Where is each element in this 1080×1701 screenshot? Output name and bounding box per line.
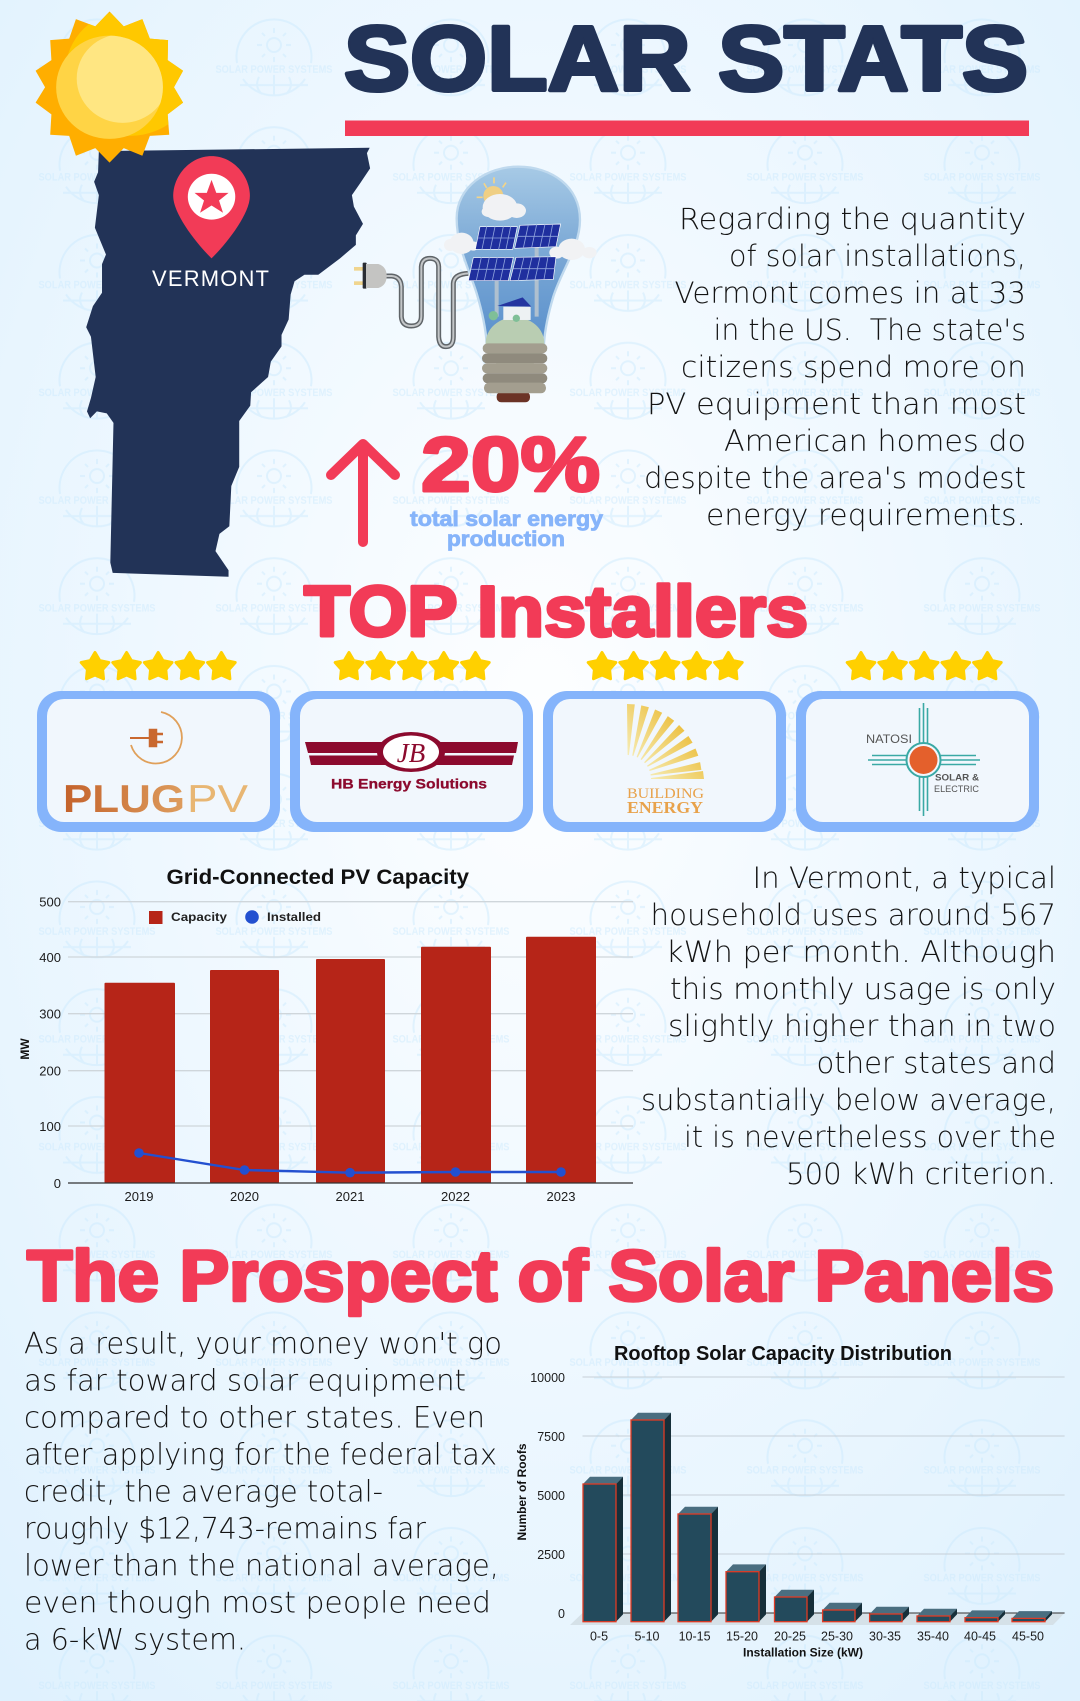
stat: 20%: 20% <box>421 422 600 508</box>
x axis labels: 20-25 <box>774 1630 806 1644</box>
y axis labels: 2500 <box>537 1548 565 1562</box>
text block: intro: in the US. The state's <box>714 313 1026 347</box>
text block: prospect: after applying for the federal tax <box>24 1438 497 1472</box>
stat caption <box>410 508 603 551</box>
text block: household usage <box>641 861 1056 1191</box>
title underline bar <box>345 120 1029 136</box>
text block: intro: Vermont comes in at 33 <box>674 276 1026 310</box>
bars: capacity <box>104 937 596 1183</box>
y axis title: MW <box>18 1038 32 1060</box>
x axis labels <box>590 1630 1044 1644</box>
heading: the prospect of solar panels: The Prospect of Solar Panels <box>27 1238 1054 1316</box>
text block: intro: energy requirements. <box>706 498 1026 532</box>
card: HB Energy Solutions <box>290 691 533 832</box>
text block: prospect: a 6-kW system. <box>24 1623 246 1657</box>
text block: intro: PV equipment than most <box>647 387 1026 421</box>
x axis labels: 10-15 <box>679 1630 711 1644</box>
x axis labels: 2020 <box>230 1189 259 1204</box>
text block: prospect: credit, the average total- <box>24 1475 383 1509</box>
y axis labels: 200 <box>39 1064 61 1078</box>
card: PlugPV <box>37 691 280 832</box>
logo text: Building Energy: BUILDING <box>627 786 704 802</box>
illustration: solar light bulb with plug <box>354 167 597 402</box>
legend <box>149 910 321 924</box>
icon: map pin <box>173 156 250 258</box>
x axis labels: 25-30 <box>821 1630 853 1644</box>
state map: Vermont <box>86 148 370 577</box>
text block: household usage: substantially below average, <box>641 1083 1056 1117</box>
3D bars <box>583 1413 1052 1622</box>
logo text: PlugPV <box>63 778 248 821</box>
text block: household usage: household uses around 567 <box>650 898 1056 932</box>
text block: household usage: it is nevertheless over the <box>684 1120 1056 1154</box>
heading: top installers: TOP Installers <box>304 573 808 652</box>
text block: prospect: lower than the national average, <box>24 1549 499 1583</box>
y axis labels: 0 <box>558 1607 565 1621</box>
text block: intro: citizens spend more on <box>681 350 1026 384</box>
text block: intro: American homes do <box>724 424 1026 458</box>
logo: PlugPV plug icon <box>130 712 182 763</box>
ratings: five stars, installer 1 <box>81 652 235 679</box>
icon: sun <box>36 12 183 162</box>
logo text: Natosi: SOLAR & <box>935 772 980 782</box>
y axis labels: 10000 <box>530 1371 565 1385</box>
text block: intro <box>644 202 1026 532</box>
text block: intro: Regarding the quantity <box>679 202 1026 236</box>
logo text: HB Energy Solutions: HB Energy Solutions <box>331 776 487 792</box>
card: Building Energy <box>543 691 786 832</box>
logo text: Natosi: ELECTRIC <box>934 784 979 794</box>
x axis labels: 15-20 <box>726 1630 758 1644</box>
x axis labels <box>125 1189 575 1204</box>
chart: Grid-Connected PV Capacity <box>18 866 633 1204</box>
logo text: Natosi <box>866 732 980 794</box>
logo text: Building Energy <box>627 786 704 817</box>
chart: Rooftop Solar Capacity Distribution <box>515 1343 1065 1660</box>
logo text: Natosi: NATOSI <box>866 732 912 746</box>
text block: intro: despite the area's modest <box>644 461 1026 495</box>
card: Natosi Solar & Electric <box>796 691 1039 832</box>
y axis labels: 300 <box>39 1006 61 1022</box>
text block: household usage: slightly higher than in two <box>668 1009 1056 1043</box>
y axis labels: 500 <box>39 894 61 910</box>
ratings: five stars, installer 2 <box>335 652 489 679</box>
legend: Installed <box>267 910 321 924</box>
y axis labels: 5000 <box>537 1489 565 1503</box>
x axis labels: 2019 <box>125 1189 153 1204</box>
chart title: Grid-Connected PV Capacity <box>166 866 469 889</box>
logo: HB wings and monogram: JB <box>397 738 425 768</box>
y axis labels: 0 <box>54 1176 61 1191</box>
logo: Natosi zia symbol <box>868 703 980 816</box>
legend: Capacity <box>171 910 227 924</box>
stat caption: total solar energy <box>410 508 603 531</box>
ratings: five stars, installer 4 <box>847 652 1001 679</box>
title: SOLAR STATS <box>344 8 1028 110</box>
text block: prospect: compared to other states. Even <box>24 1401 485 1435</box>
stat caption: production <box>447 528 565 551</box>
logo text: PlugPV: PLUG <box>63 778 185 821</box>
line: installed <box>134 1148 566 1177</box>
y axis labels <box>39 894 61 1191</box>
text block: prospect: roughly $12,743-remains far <box>24 1512 426 1546</box>
arrow: up <box>331 444 395 542</box>
x axis labels: 40-45 <box>964 1630 996 1644</box>
x axis labels: 2023 <box>547 1189 575 1204</box>
chart title: Rooftop Solar Capacity Distribution <box>614 1343 952 1365</box>
x axis labels: 30-35 <box>869 1630 901 1644</box>
logo text: Building Energy: ENERGY <box>627 798 703 817</box>
x axis labels: 2022 <box>441 1189 470 1204</box>
text block: household usage: other states and <box>816 1046 1056 1080</box>
text block: household usage: 500 kWh criterion. <box>786 1157 1056 1191</box>
text block: prospect: as far toward solar equipment <box>24 1364 466 1398</box>
y axis labels: 100 <box>39 1119 61 1134</box>
logo text: PlugPV: PV <box>187 778 248 821</box>
text block: intro: of solar installations, <box>729 239 1026 273</box>
text block: household usage: kWh per month. Although <box>666 935 1056 969</box>
state label: VERMONT <box>152 266 269 291</box>
text block: prospect <box>24 1327 502 1657</box>
text block: household usage: this monthly usage is only <box>670 972 1056 1006</box>
x axis title: Installation Size (kW) <box>743 1646 863 1660</box>
text block: prospect: As a result, your money won't go <box>24 1327 502 1361</box>
x axis labels: 0-5 <box>590 1630 608 1644</box>
ratings: five stars, installer 3 <box>588 652 742 679</box>
y axis title: Number of Roofs <box>515 1443 529 1540</box>
text block: prospect: even though most people need <box>24 1586 491 1620</box>
text block: household usage: In Vermont, a typical <box>752 861 1056 895</box>
x axis labels: 2021 <box>336 1189 364 1204</box>
x axis labels: 35-40 <box>917 1630 949 1644</box>
x axis labels: 45-50 <box>1012 1630 1044 1644</box>
y axis labels <box>530 1371 565 1621</box>
logo: Building Energy sun rays <box>627 704 704 779</box>
y axis labels: 7500 <box>537 1430 565 1444</box>
y axis labels: 400 <box>39 950 61 965</box>
x axis labels: 5-10 <box>634 1630 660 1644</box>
logo: HB wings and monogram <box>305 732 518 772</box>
